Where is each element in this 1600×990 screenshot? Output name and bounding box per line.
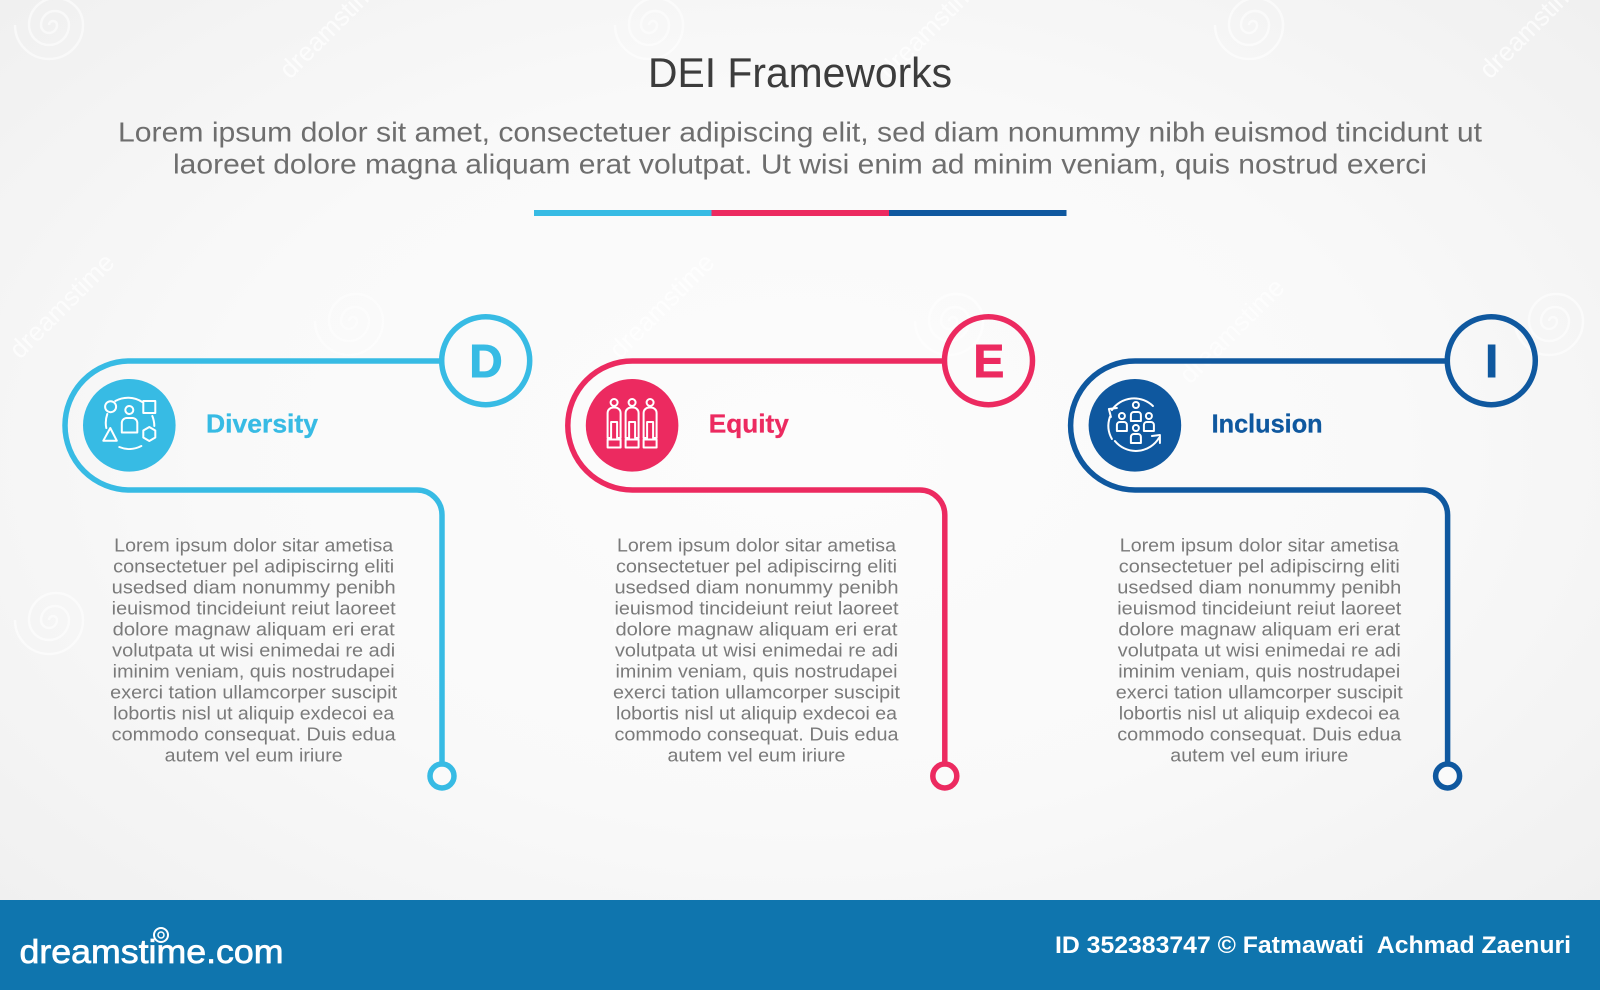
label: Equity: Equity bbox=[709, 408, 789, 438]
letter badge: D: D bbox=[469, 335, 503, 387]
body text: Equity: commodo consequat. Duis edua bbox=[614, 725, 900, 745]
body text: Equity: consectetuer pel adipiscirng eliti bbox=[616, 557, 897, 577]
letter badge: E bbox=[944, 317, 1032, 405]
body text: Inclusion: autem vel eum iriure bbox=[1170, 746, 1348, 766]
body text: Diversity: lobortis nisl ut aliquip exdecoi ea bbox=[113, 704, 395, 724]
body text: Equity: Lorem ipsum dolor sitar ametisa bbox=[617, 536, 897, 556]
letter badge: I: I bbox=[1485, 335, 1498, 387]
panel: Diversity bbox=[65, 317, 530, 788]
panel: Inclusion bbox=[1071, 317, 1535, 788]
text: dreamstime bbox=[1173, 272, 1290, 389]
tricolor divider bar bbox=[534, 210, 1066, 216]
text: dreamstime bbox=[3, 247, 120, 364]
icon: diversity shapes and person bbox=[83, 379, 176, 472]
body text: Inclusion: dolore magnaw aliquam eri erat bbox=[1118, 620, 1400, 640]
body text: Inclusion: consectetuer pel adipiscirng eliti bbox=[1119, 557, 1400, 577]
connector line: Diversity bbox=[65, 361, 442, 764]
body text: Inclusion: lobortis nisl ut aliquip exdecoi ea bbox=[1119, 704, 1401, 724]
body text: Diversity: commodo consequat. Duis edua bbox=[112, 725, 397, 745]
body text: Equity: volutpata ut wisi enimedai re adi bbox=[615, 641, 898, 661]
body text: Equity: lobortis nisl ut aliquip exdecoi ea bbox=[616, 704, 898, 724]
body text: Diversity: autem vel eum iriure bbox=[165, 746, 343, 766]
body text: Inclusion: commodo consequat. Duis edua bbox=[1117, 725, 1402, 745]
end node: Equity bbox=[933, 764, 957, 788]
body text: Inclusion: usedsed diam nonummy penibh bbox=[1117, 578, 1401, 598]
subtitle text block: laoreet dolore magna aliquam erat volutpat. Ut wisi enim ad minim veniam, quis nostrud exerci bbox=[173, 148, 1427, 180]
footer credit: ID 352383747 © Fatmawati Achmad Zaenuri bbox=[1055, 932, 1571, 959]
label: Inclusion: Inclusion bbox=[1212, 408, 1323, 438]
body text: Diversity: dolore magnaw aliquam eri erat bbox=[113, 620, 395, 640]
body text: Diversity: consectetuer pel adipiscirng eliti bbox=[113, 557, 394, 577]
subtitle text block: Lorem ipsum dolor sit amet, consectetuer adipiscing elit, sed diam nonummy nibh euismod tincidunt ut bbox=[118, 116, 1482, 148]
footer logo: dreamstime.com bbox=[20, 933, 284, 970]
body text: Inclusion: volutpata ut wisi enimedai re adi bbox=[1118, 641, 1401, 661]
connector line: Inclusion bbox=[1071, 361, 1448, 764]
end node: Diversity bbox=[430, 764, 454, 788]
body text: Equity: dolore magnaw aliquam eri erat bbox=[615, 620, 897, 640]
panel: Equity bbox=[568, 317, 1032, 788]
body text: Equity bbox=[613, 536, 900, 766]
body text: Diversity bbox=[110, 536, 397, 766]
subtitle text block bbox=[118, 116, 1482, 180]
body text: Equity: autem vel eum iriure bbox=[667, 746, 845, 766]
icon: inclusion people in cycle bbox=[1089, 379, 1181, 472]
icon: equity three figures bbox=[586, 379, 678, 472]
title: DEI Frameworks bbox=[648, 49, 952, 96]
label: Diversity: Diversity bbox=[206, 408, 319, 438]
body text: Equity: usedsed diam nonummy penibh bbox=[614, 578, 898, 598]
body text: Diversity: iminim veniam, quis nostrudapei bbox=[113, 662, 395, 682]
body text: Inclusion bbox=[1116, 536, 1403, 766]
body text: Inclusion: exerci tation ullamcorper suscipit bbox=[1116, 683, 1403, 703]
body text: Inclusion: Lorem ipsum dolor sitar ametisa bbox=[1120, 536, 1400, 556]
body text: Diversity: exerci tation ullamcorper suscipit bbox=[110, 683, 397, 703]
letter badge: I bbox=[1447, 317, 1535, 405]
text: dreamstime bbox=[603, 247, 720, 364]
body text: Diversity: usedsed diam nonummy penibh bbox=[112, 578, 396, 598]
body text: Diversity: volutpata ut wisi enimedai re adi bbox=[112, 641, 395, 661]
footer banner bbox=[0, 900, 1600, 990]
body text: Equity: exerci tation ullamcorper suscipit bbox=[613, 683, 900, 703]
body text: Inclusion: ieuismod tincideiunt reiut laoreet bbox=[1117, 599, 1401, 619]
connector line: Equity bbox=[568, 361, 945, 764]
body text: Inclusion: iminim veniam, quis nostrudapei bbox=[1118, 662, 1400, 682]
letter badge: E: E bbox=[973, 335, 1004, 387]
body text: Diversity: ieuismod tincideiunt reiut laoreet bbox=[112, 599, 396, 619]
body text: Equity: ieuismod tincideiunt reiut laoreet bbox=[614, 599, 898, 619]
body text: Equity: iminim veniam, quis nostrudapei bbox=[615, 662, 897, 682]
letter badge: D bbox=[442, 317, 530, 405]
body text: Diversity: Lorem ipsum dolor sitar ametisa bbox=[114, 536, 394, 556]
end node: Inclusion bbox=[1436, 764, 1460, 788]
